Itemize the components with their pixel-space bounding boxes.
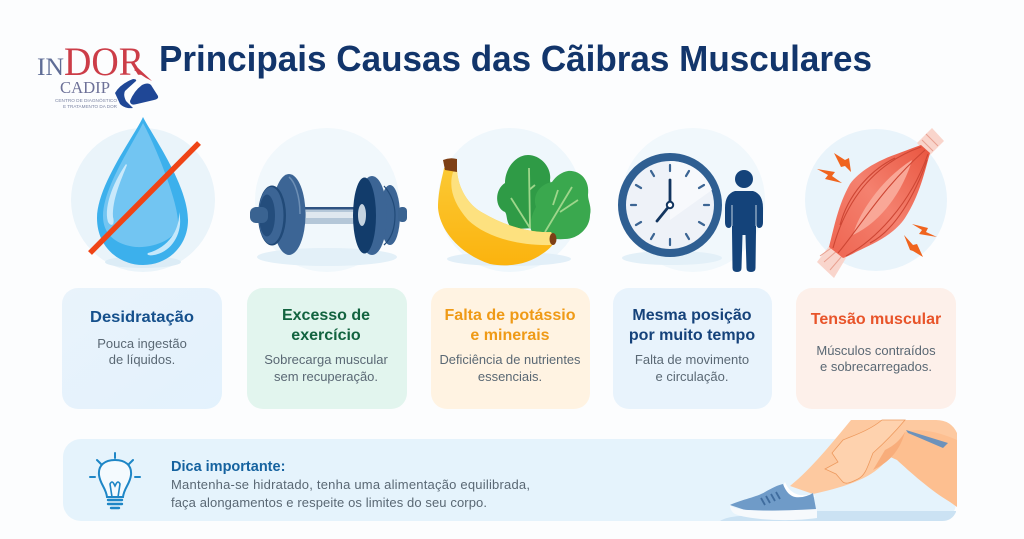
logo: InDor Cadip: IN — [37, 54, 64, 81]
thigh — [875, 425, 957, 507]
panel: Mesma posição por muito tempo: por muito tempo — [629, 327, 755, 344]
tendons — [817, 245, 846, 278]
spinach leaf back — [497, 155, 551, 229]
calf and upper leg — [790, 420, 957, 494]
illustration: leg with hand and shoe — [720, 420, 957, 521]
logo: InDor Cadip: DOR — [64, 39, 144, 84]
panel: Falta de potássio e minerais: essenciais. — [478, 369, 542, 384]
panel: Dica importante — [63, 439, 956, 521]
muscle belly — [829, 145, 930, 258]
panel: Tensão muscular: Tensão muscular — [811, 311, 941, 328]
floor shadow — [720, 511, 956, 521]
panel: Desidratação — [62, 288, 222, 409]
panel: Excesso de exercício: sem recuperação. — [274, 369, 378, 384]
icon: tense muscle — [805, 128, 947, 278]
left plates — [272, 174, 306, 255]
panel: Desidratação: Desidratação — [90, 309, 194, 326]
tip text: Mantenha-se hidratado, tenha uma alimentação equilibrada, — [171, 477, 530, 492]
panel: Tensão muscular — [796, 288, 956, 409]
logo: InDor Cadip: E TRATAMENTO DA DOR — [63, 104, 117, 109]
panel: Mesma posição por muito tempo: Falta de movimento — [635, 352, 749, 367]
logo: InDor Cadip: CADIP — [60, 78, 110, 97]
logo: InDor Cadip — [37, 39, 158, 109]
logo: InDor Cadip: CENTRO DE DIAGNÓSTICO — [55, 98, 118, 103]
sock — [783, 482, 815, 500]
panel: Mesma posição por muito tempo — [613, 288, 772, 409]
panel: Falta de potássio e minerais: Falta de potássio — [444, 307, 576, 324]
panel: Excesso de exercício — [247, 288, 407, 409]
title: Principais Causas das Cãibras Musculares — [159, 38, 872, 79]
panel: Falta de potássio e minerais: Deficiência de nutrientes — [440, 352, 581, 367]
panel: Mesma posição por muito tempo: e circulação. — [656, 369, 728, 384]
panel: Excesso de exercício: Sobrecarga muscular — [264, 352, 388, 367]
right plates — [380, 185, 400, 245]
lightning bolts — [817, 169, 842, 183]
banana — [438, 168, 555, 265]
shoe — [730, 484, 817, 512]
panel: Desidratação: Pouca ingestão — [97, 336, 187, 351]
spinach leaf front — [531, 171, 591, 239]
bar — [303, 207, 365, 224]
icon: dumbbell — [250, 128, 407, 272]
hand — [825, 420, 905, 483]
panel: Excesso de exercício: Excesso de — [282, 307, 370, 324]
panel: Tensão muscular: Músculos contraídos — [816, 343, 936, 358]
icon: banana and spinach — [438, 128, 591, 272]
panel: Mesma posição por muito tempo: Mesma posição — [632, 307, 752, 324]
icon: light bulb — [90, 453, 140, 508]
panel: Tensão muscular: e sobrecarregados. — [820, 359, 932, 374]
panel: Desidratação: de líquidos. — [109, 352, 175, 367]
tip text — [171, 459, 530, 510]
panel: Falta de potássio e minerais — [431, 288, 590, 409]
tip text: Dica importante: — [171, 459, 285, 475]
shorts stripe — [906, 430, 948, 448]
panel: Falta de potássio e minerais: e minerais — [470, 327, 550, 344]
panel: Excesso de exercício: exercício — [291, 327, 361, 344]
icon: water drop with red slash — [71, 117, 215, 272]
tip text: faça alongamentos e respeite os limites do seu corpo. — [171, 495, 487, 510]
icon: clock and person — [621, 128, 765, 272]
